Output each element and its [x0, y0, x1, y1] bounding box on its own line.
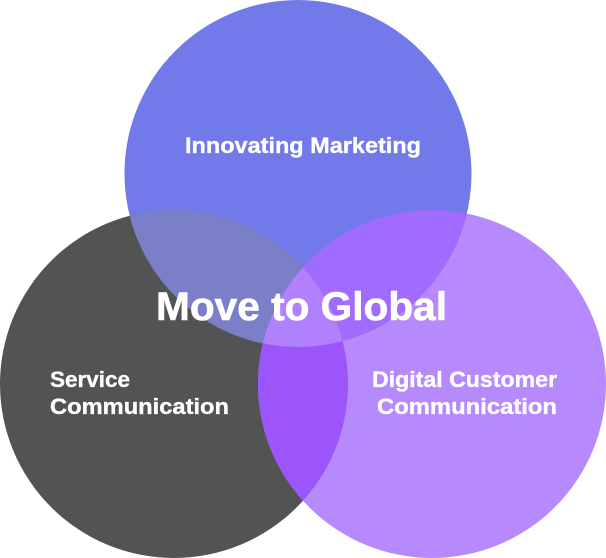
- label: Digital Customer Communication: [372, 367, 557, 419]
- overlap: service and digital: [258, 269, 348, 501]
- label: Digital Customer Communication: Digital Customer: [372, 367, 557, 392]
- overlap: center of all three: [263, 268, 342, 347]
- circle: Digital Customer Communication: [258, 210, 606, 558]
- label: Service Communication: Communication: [50, 394, 229, 419]
- overlap: marketing and service: [130, 210, 303, 344]
- overlap: marketing and digital: [264, 210, 467, 341]
- label: Service Communication: Service: [50, 367, 130, 392]
- circle: Service Communication: [0, 210, 348, 558]
- label: Digital Customer Communication: Communication: [377, 394, 557, 419]
- circle: Innovating Marketing: [124, 0, 472, 347]
- label: Service Communication: [50, 367, 229, 419]
- title: Move to Global: Move to Global: [156, 285, 447, 329]
- label: Innovating Marketing: Innovating Marketing: [185, 133, 421, 158]
